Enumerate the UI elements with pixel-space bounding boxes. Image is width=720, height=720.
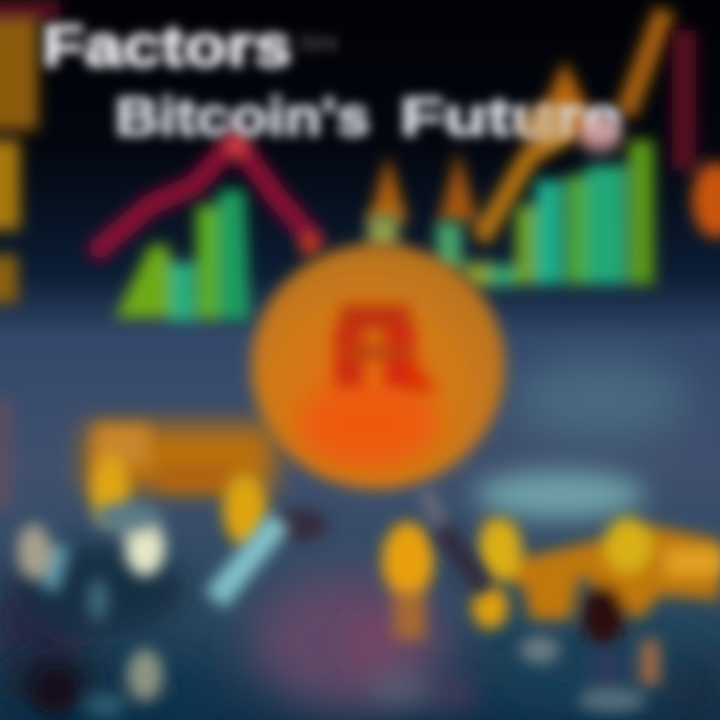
gold bar xyxy=(478,515,720,712)
orange spikes xyxy=(368,10,665,240)
title: in xyxy=(300,30,338,55)
left bar chart xyxy=(92,133,321,322)
orange lower glow xyxy=(298,385,438,465)
title: Bitcoin's xyxy=(115,87,370,147)
pale teal slab xyxy=(475,471,645,519)
right gold ingots and tool xyxy=(382,471,720,712)
title glow over spikes xyxy=(519,105,622,153)
red trend line xyxy=(92,133,321,256)
right edge red line and orange blob xyxy=(672,30,720,238)
left silver coins xyxy=(0,502,280,717)
left edge glowing bars xyxy=(0,0,60,510)
center gold piece xyxy=(382,522,508,640)
dark shadow under coin xyxy=(272,509,328,541)
purple reflection floor xyxy=(342,610,478,709)
right bar chart xyxy=(368,10,665,287)
dark tool handle xyxy=(425,490,485,590)
bitcoin symbol xyxy=(335,305,438,392)
green bars xyxy=(368,140,654,287)
title: Future xyxy=(400,87,622,147)
green bars xyxy=(115,190,250,322)
title xyxy=(42,14,622,147)
left gold ingots xyxy=(85,425,275,546)
bitcoin coin xyxy=(251,243,505,489)
title: Factors xyxy=(42,14,292,79)
coin body xyxy=(251,243,505,489)
